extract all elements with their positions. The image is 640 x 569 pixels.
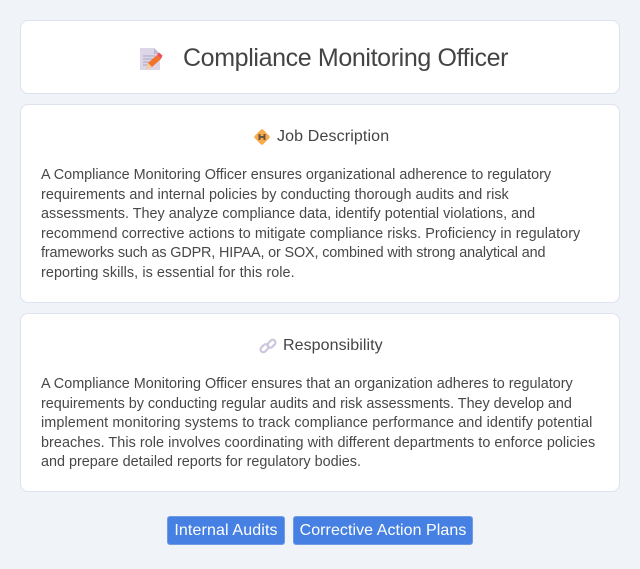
text block: responsibility: and prepare detailed reports for regulatory bodies. — [41, 454, 361, 470]
text block: job description: frameworks such as GDPR, HIPAA, or SOX, combined with strong analytical and — [41, 245, 545, 261]
text block: responsibility: requirements by conducting regular audits and risk assessments. They develop and — [41, 396, 572, 412]
text block: responsibility — [41, 376, 595, 470]
tag: corrective action plans: Corrective Action Plans — [300, 522, 466, 539]
text block: job description: recommend corrective actions to mitigate compliance risks. Proficiency in regulatory — [41, 226, 580, 242]
panel: responsibility — [20, 313, 620, 492]
text block: responsibility: implement monitoring systems to track compliance performance and identify potential — [41, 415, 592, 431]
text block: job description: A Compliance Monitoring Officer ensures organizational adherence to regulatory — [41, 167, 551, 183]
tag: corrective action plans — [293, 516, 473, 545]
text block: job description: requirements and internal policies by conducting thorough audits and risk — [41, 187, 509, 203]
title text: Compliance Monitoring Officer — [183, 44, 508, 72]
text block: job description: assessments. They analyze compliance data, identify potential violations, and — [41, 206, 535, 222]
tag: internal audits: Internal Audits — [174, 522, 278, 539]
text block: responsibility: A Compliance Monitoring Officer ensures that an organization adheres to regulatory — [41, 376, 573, 392]
heading: responsibility: Responsibility — [283, 337, 383, 354]
tag: internal audits — [167, 516, 285, 545]
text block: responsibility: breaches. This role involves coordinating with different departments to enforce policies — [41, 435, 595, 451]
panel: job description — [20, 104, 620, 303]
heading: job description: Job Description — [277, 128, 389, 145]
text block: job description: reporting skills, is essential for this role. — [41, 265, 295, 281]
icon: document with pencil — [140, 48, 162, 70]
icon: chain link — [260, 338, 276, 354]
icon: road sign — [254, 129, 270, 145]
panel: title — [20, 20, 620, 94]
text block: job description — [41, 167, 580, 281]
